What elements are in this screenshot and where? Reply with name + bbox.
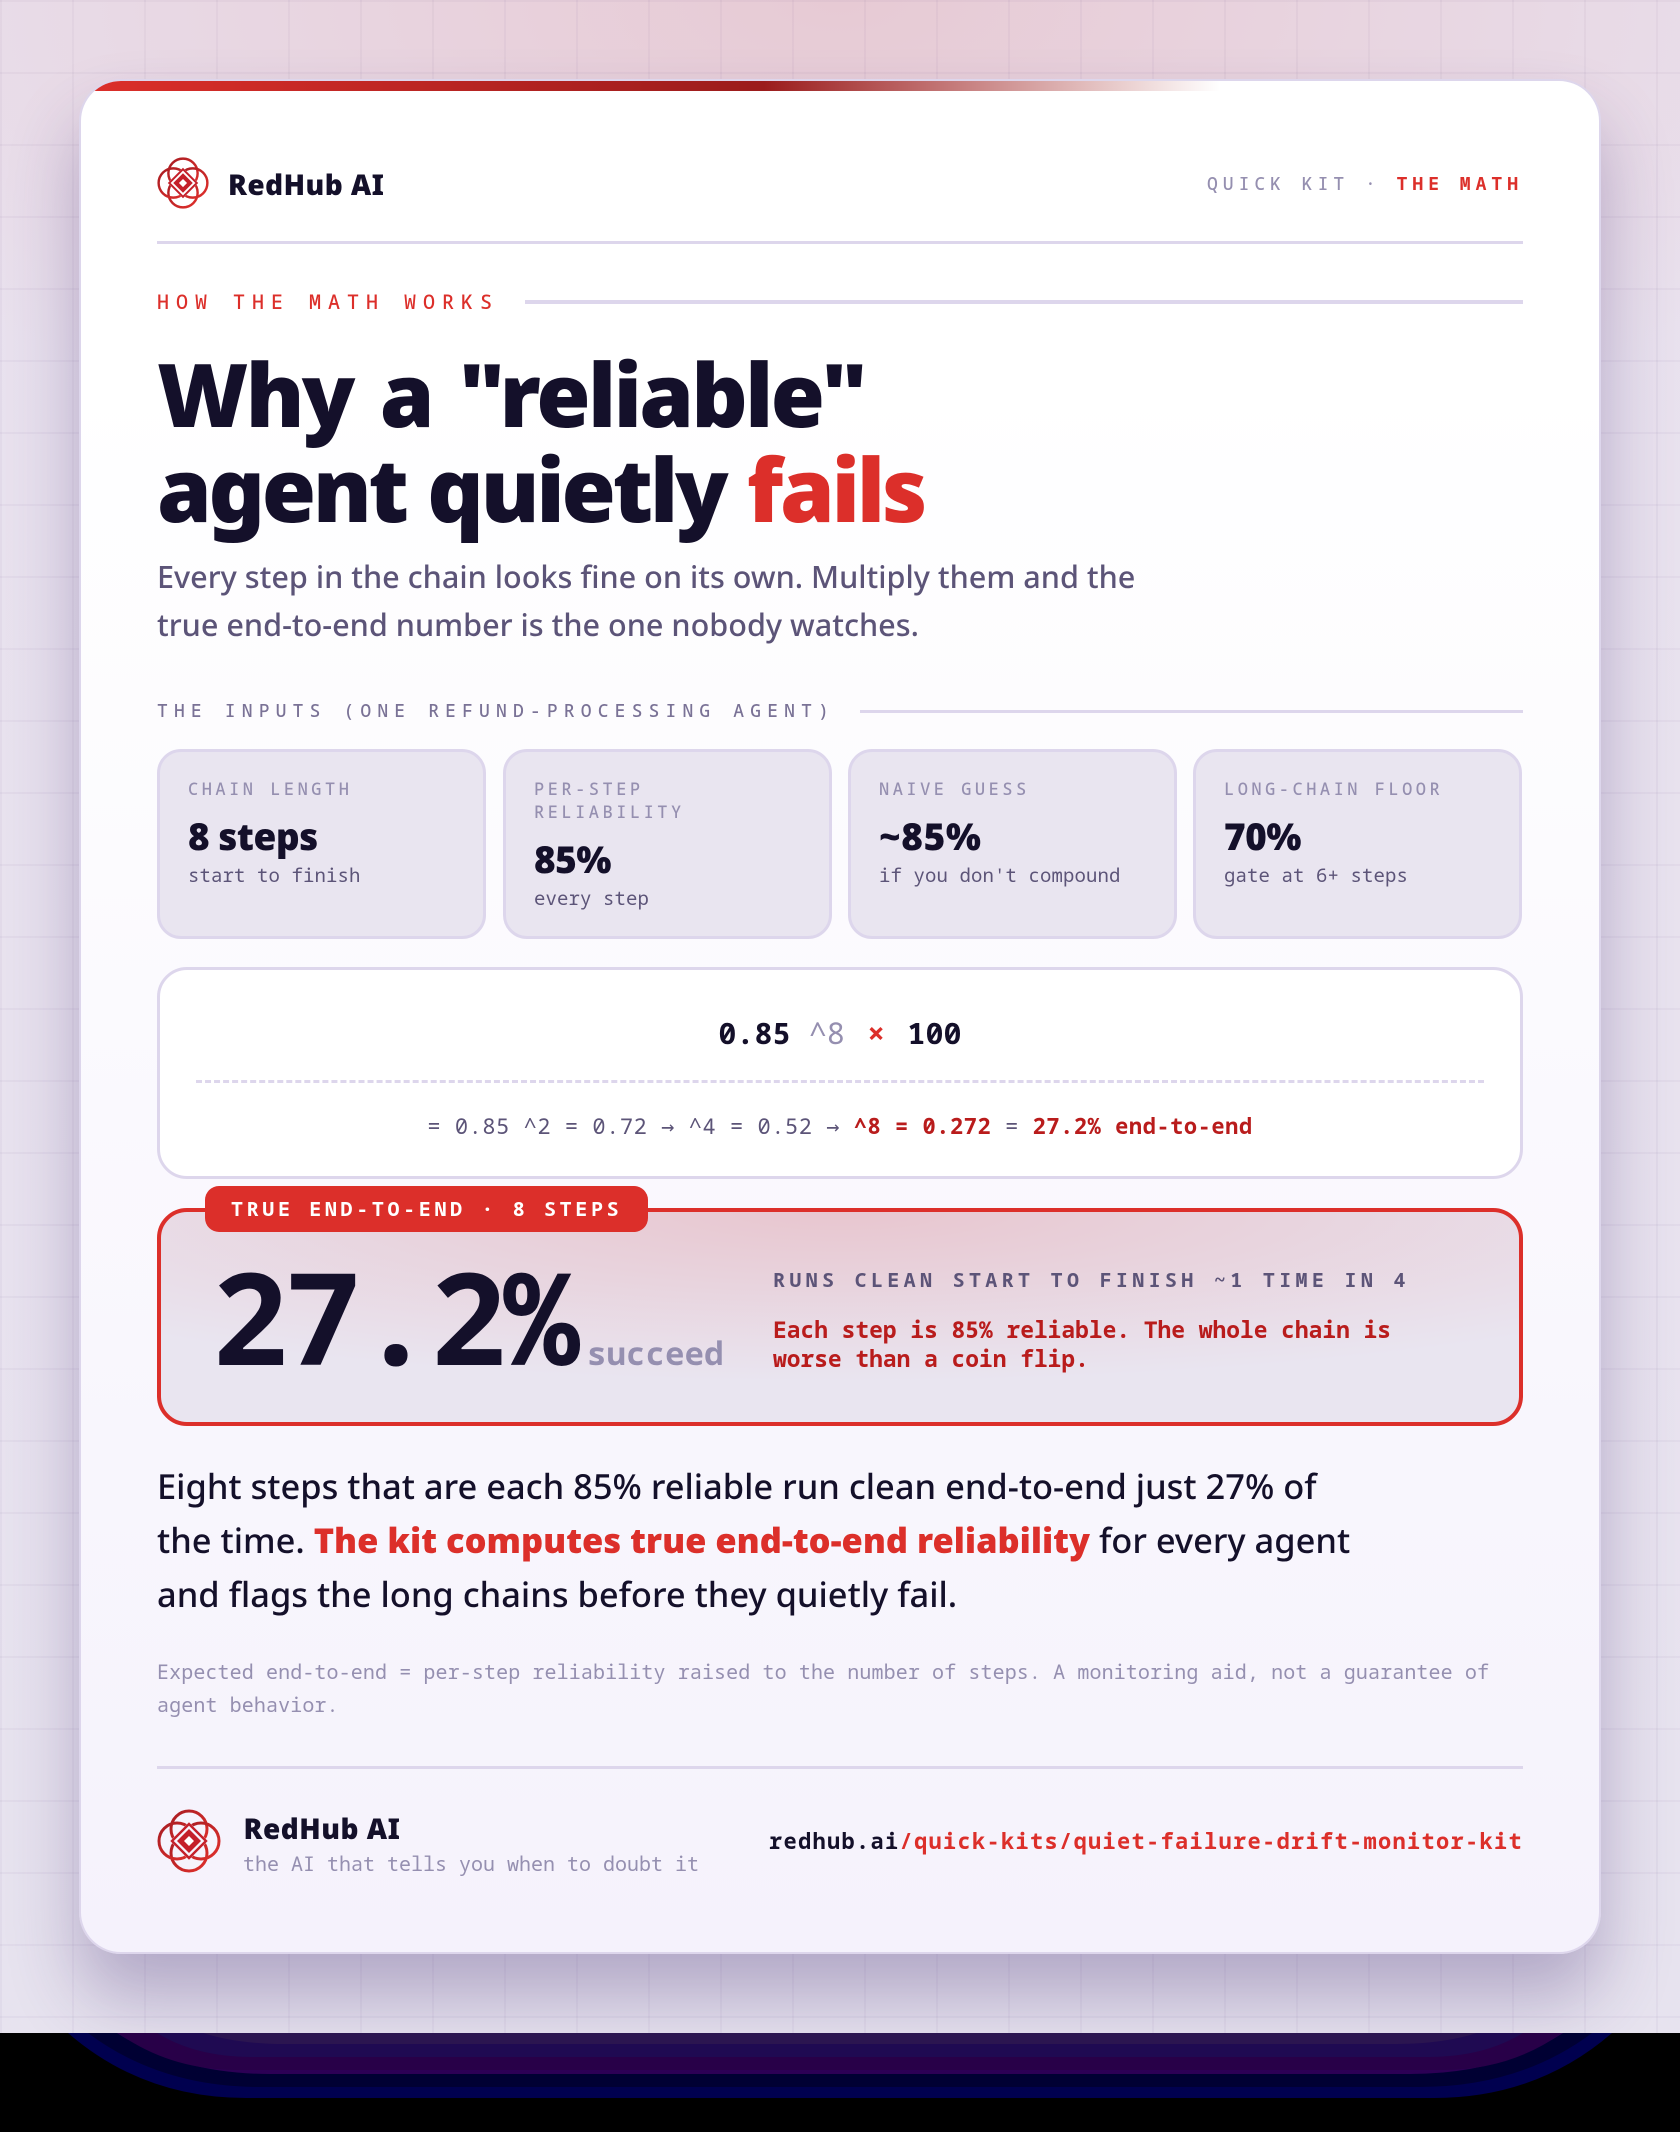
- result caption: RUNS CLEAN START TO FINISH ~1 TIME IN 4: [773, 1266, 1410, 1293]
- panel: naive guess: [848, 749, 1177, 939]
- icon: footer logo: [158, 1810, 220, 1872]
- subtitle: [157, 555, 1135, 645]
- panel: long-chain floor: gate at 6+ steps: [1224, 862, 1408, 888]
- panel: long-chain floor: LONG-CHAIN FLOOR: [1224, 777, 1443, 800]
- result note: worse than a coin flip.: [773, 1343, 1089, 1374]
- panel: per-step reliability: RELIABILITY: [534, 800, 685, 823]
- subtitle: Every step in the chain looks fine on its own. Multiply them and the: [157, 555, 1135, 597]
- body paragraph: and flags the long chains before they quietly fail.: [157, 1571, 957, 1618]
- panel: formula: [157, 967, 1523, 1179]
- panel: main card: [79, 79, 1601, 1954]
- subtitle: true end-to-end number is the one nobody watches.: [157, 603, 919, 645]
- panel: chain length: start to finish: [188, 862, 361, 888]
- fine print: [157, 1658, 1489, 1718]
- top accent bar: [80, 80, 1220, 91]
- footer brand: RedHub AI: [244, 1810, 400, 1848]
- fine print: Expected end-to-end = per-step reliability raised to the number of steps. A monitoring aid, not a guarantee of: [157, 1658, 1489, 1685]
- header divider: [157, 241, 1523, 244]
- brand name: RedHub AI: [228, 166, 384, 204]
- icon: header logo: [157, 157, 209, 209]
- panel: per-step reliability: [503, 749, 832, 939]
- panel: chain length: [157, 749, 486, 939]
- section label: THE INPUTS (ONE REFUND-PROCESSING AGENT): [157, 699, 835, 723]
- result unit: succeed: [587, 1330, 724, 1375]
- result tag: [205, 1186, 648, 1232]
- formula expansion: = 0.85 ^2 = 0.72 → ^4 = 0.52 → ^8 = 0.272 = 27.2% end-to-end: [427, 1111, 1253, 1141]
- formula: 0.85 ^8 × 100: [718, 1012, 962, 1053]
- title: Why a "reliable": [157, 333, 865, 453]
- panel: naive guess: NAIVE GUESS: [879, 777, 1030, 800]
- result number: 27.2%: [212, 1228, 576, 1403]
- result note: Each step is 85% reliable. The whole chain is: [773, 1314, 1391, 1345]
- panel: long-chain floor: 70%: [1224, 810, 1301, 861]
- kicker: HOW THE MATH WORKS: [157, 288, 499, 315]
- footer tagline: the AI that tells you when to doubt it: [243, 1850, 699, 1877]
- result tag: TRUE END-TO-END · 8 STEPS: [231, 1195, 622, 1222]
- panel: per-step reliability: PER-STEP: [534, 777, 644, 800]
- body paragraph: [157, 1463, 1350, 1618]
- footer url: redhub.ai/quick-kits/quiet-failure-drift-monitor-kit: [769, 1826, 1523, 1856]
- panel: per-step reliability: every step: [534, 885, 649, 911]
- body paragraph: Eight steps that are each 85% reliable run clean end-to-end just 27% of: [157, 1463, 1317, 1510]
- panel: chain length: CHAIN LENGTH: [188, 777, 352, 800]
- panel: per-step reliability: 85%: [534, 833, 611, 884]
- shadow bands below the page: [68, 2033, 1612, 2098]
- panel: long-chain floor: [1193, 749, 1522, 939]
- panel: result: [157, 1208, 1523, 1426]
- header tag: QUICK KIT · THE MATH: [1207, 172, 1523, 196]
- result note: [773, 1314, 1391, 1374]
- panel: chain length: 8 steps: [188, 810, 318, 861]
- title: agent quietly fails: [157, 428, 924, 548]
- fine print: agent behavior.: [157, 1691, 339, 1718]
- panel: naive guess: if you don't compound: [879, 862, 1121, 888]
- panel: naive guess: ~85%: [879, 810, 982, 861]
- footer divider: [157, 1766, 1523, 1769]
- body paragraph: the time. The kit computes true end-to-end reliability for every agent: [157, 1517, 1350, 1564]
- title: [157, 333, 924, 548]
